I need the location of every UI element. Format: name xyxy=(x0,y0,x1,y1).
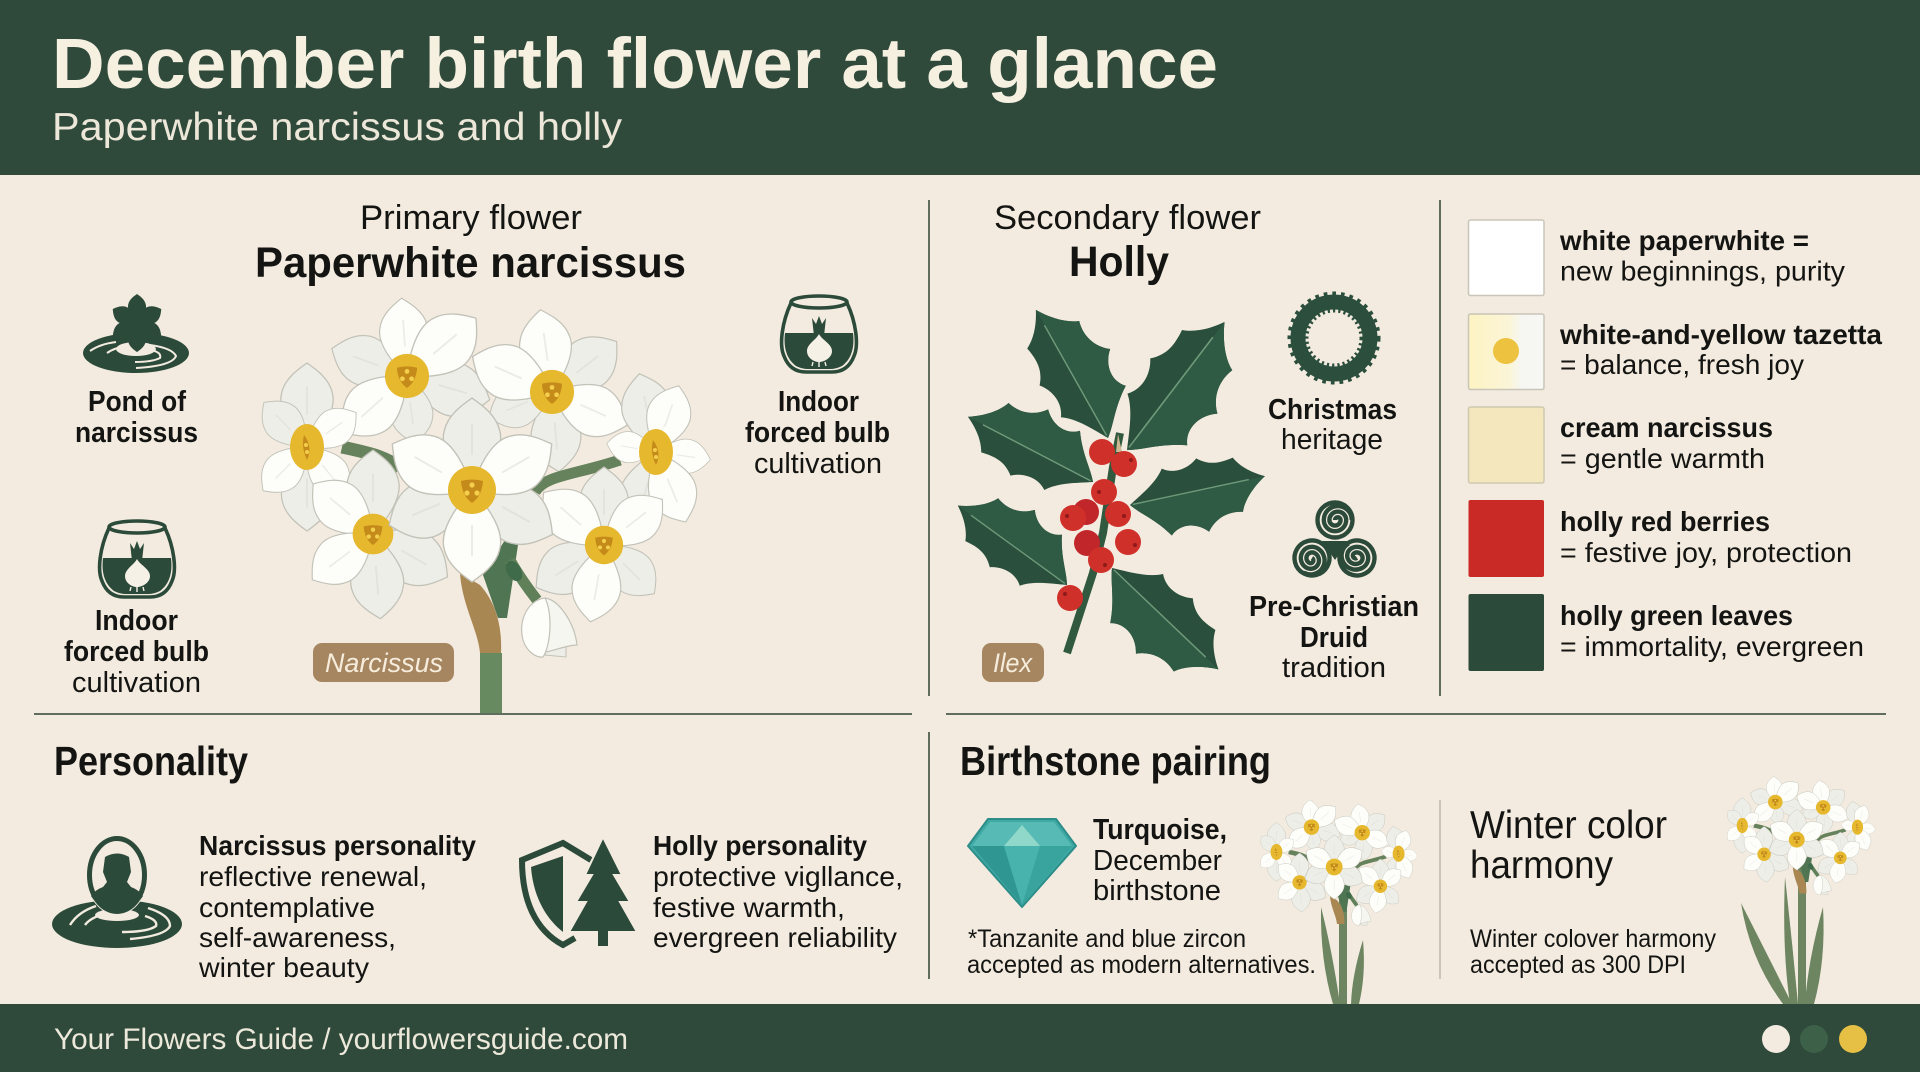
subtitle: Paperwhite narcissus and holly xyxy=(52,106,623,149)
heading: Personality: Personality xyxy=(54,738,248,784)
legend text: white paperwhite: white paperwhite = xyxy=(1559,225,1809,256)
label: Pre-Christian Druid tradition: Druid xyxy=(1300,622,1368,654)
panel: secondary flower heading xyxy=(994,199,1261,286)
label pill: Narcissus xyxy=(313,643,454,682)
text: Narcissus personality xyxy=(198,830,476,983)
label pill: Ilex: Ilex xyxy=(993,648,1033,678)
text: Holly personality: evergreen reliability xyxy=(653,922,897,953)
thin divider before winter harmony xyxy=(1439,800,1441,979)
legend text: white paperwhite xyxy=(1559,225,1845,286)
panel: secondary flower heading: Holly xyxy=(1069,238,1169,286)
text: Holly personality: protective vigllance, xyxy=(653,861,903,892)
heading: Winter color harmony xyxy=(1470,804,1667,887)
label: forced bulb right xyxy=(745,386,890,480)
legend text: holly green leaves: = immortality, evergreen xyxy=(1560,631,1864,662)
swatch: white and yellow tazetta xyxy=(1468,314,1544,390)
text: Narcissus personality: contemplative xyxy=(199,892,375,923)
legend text: holly red berries xyxy=(1560,506,1852,568)
illustration: holly sprig xyxy=(940,288,1274,702)
panel: footer band xyxy=(0,1004,1920,1072)
legend text: cream narcissus: cream narcissus xyxy=(1560,412,1773,443)
footer colour dots xyxy=(1762,1025,1867,1053)
icon: pond of narcissus xyxy=(83,294,189,373)
legend text: holly red berries: holly red berries xyxy=(1560,506,1770,537)
text: Turquoise birthstone: birthstone xyxy=(1093,875,1221,907)
panel: primary flower heading: Primary flower xyxy=(360,199,582,237)
icon: Druid triple spiral xyxy=(1288,502,1381,582)
legend text: tazetta: = balance, fresh joy xyxy=(1560,349,1804,380)
text: Narcissus personality: winter beauty xyxy=(198,952,369,983)
text: Holly personality xyxy=(653,830,903,953)
footnote: modern alternatives xyxy=(967,925,1316,979)
icon: reflection in pond xyxy=(52,835,182,948)
icon: forced bulb glass left xyxy=(100,521,174,597)
text: Narcissus personality: reflective renewal, xyxy=(199,861,427,892)
panel dividers xyxy=(34,200,1886,979)
label: forced bulb left xyxy=(64,605,209,699)
illustration: paperwhite narcissus bouquet xyxy=(249,296,713,657)
label: forced bulb left: cultivation xyxy=(72,667,201,699)
panel: header band xyxy=(0,0,1920,175)
panel: primary flower heading: Paperwhite narcissus xyxy=(255,239,686,287)
label: Pre-Christian Druid tradition: Pre-Christian xyxy=(1249,591,1419,623)
swatch: white paperwhite xyxy=(1468,220,1544,296)
swatch: holly red berries xyxy=(1468,500,1544,577)
heading: Winter color harmony: harmony xyxy=(1470,844,1613,887)
text: winter colover harmony note: Winter colover harmony xyxy=(1470,925,1716,953)
label pill: Narcissus: Narcissus xyxy=(325,648,443,678)
legend text: cream narcissus xyxy=(1560,412,1773,474)
illustration: small narcissus plant xyxy=(1256,799,1418,1004)
label: pond of narcissus xyxy=(75,386,198,449)
illustration: tall narcissus plant xyxy=(1723,776,1876,1004)
icon: shield and evergreen tree xyxy=(522,837,637,947)
legend text: white paperwhite: new beginnings, purity xyxy=(1560,256,1845,286)
label: Christmas heritage: heritage xyxy=(1281,424,1383,456)
footer credit: Your Flowers Guide / yourflowersguide.com xyxy=(54,1023,628,1056)
text: Turquoise birthstone xyxy=(1093,814,1227,907)
label: Christmas heritage xyxy=(1268,394,1397,456)
legend text: holly green leaves xyxy=(1560,600,1864,662)
text: winter colover harmony note xyxy=(1470,925,1716,979)
label: forced bulb right: Indoor xyxy=(778,386,859,418)
text: Holly personality: Holly personality xyxy=(653,830,867,861)
panel: primary flower heading xyxy=(255,199,686,287)
legend text: holly green leaves: holly green leaves xyxy=(1560,600,1793,631)
stem of narcissus xyxy=(480,653,502,715)
swatch: cream narcissus xyxy=(1468,407,1544,483)
label: pond of narcissus: narcissus xyxy=(75,417,198,449)
label: forced bulb right: cultivation xyxy=(754,448,882,480)
panel: secondary flower heading: Secondary flower xyxy=(994,199,1261,237)
title: December birth flower at a glance xyxy=(52,25,1218,104)
legend text: holly red berries: = festive joy, protection xyxy=(1560,537,1852,568)
text: Turquoise birthstone: Turquoise, xyxy=(1093,814,1227,846)
label: Pre-Christian Druid tradition xyxy=(1249,591,1419,684)
text: Holly personality: festive warmth, xyxy=(653,892,845,923)
text: winter colover harmony note: accepted as 300 DPI xyxy=(1470,951,1686,979)
legend text: cream narcissus: = gentle warmth xyxy=(1560,443,1765,474)
panel: colour meaning legend xyxy=(1468,220,1882,671)
text: Turquoise birthstone: December xyxy=(1093,845,1222,877)
label: pond of narcissus: Pond of xyxy=(88,386,186,418)
label: Christmas heritage: Christmas xyxy=(1268,394,1397,426)
footnote: modern alternatives: accepted as modern alternatives. xyxy=(967,951,1316,979)
icon: forced bulb glass right xyxy=(782,296,856,372)
text: Narcissus personality: self-awareness, xyxy=(199,922,396,953)
label: forced bulb right: forced bulb xyxy=(745,417,890,449)
label: Pre-Christian Druid tradition: tradition xyxy=(1282,652,1386,684)
legend text: tazetta: white-and-yellow tazetta xyxy=(1559,319,1882,350)
text: Narcissus personality: Narcissus personality xyxy=(199,830,476,861)
icon: turquoise gem xyxy=(968,819,1076,907)
heading: Winter color harmony: Winter color xyxy=(1470,804,1667,847)
label pill: Ilex xyxy=(982,643,1044,682)
icon: Christmas wreath xyxy=(1298,302,1370,374)
label: forced bulb left: forced bulb xyxy=(64,636,209,668)
swatch: holly green leaves xyxy=(1468,594,1544,671)
legend text: tazetta xyxy=(1559,319,1882,380)
footnote: modern alternatives: *Tanzanite and blue zircon xyxy=(968,925,1246,953)
label: forced bulb left: Indoor xyxy=(95,605,178,637)
heading: Birthstone pairing: Birthstone pairing xyxy=(960,738,1271,784)
